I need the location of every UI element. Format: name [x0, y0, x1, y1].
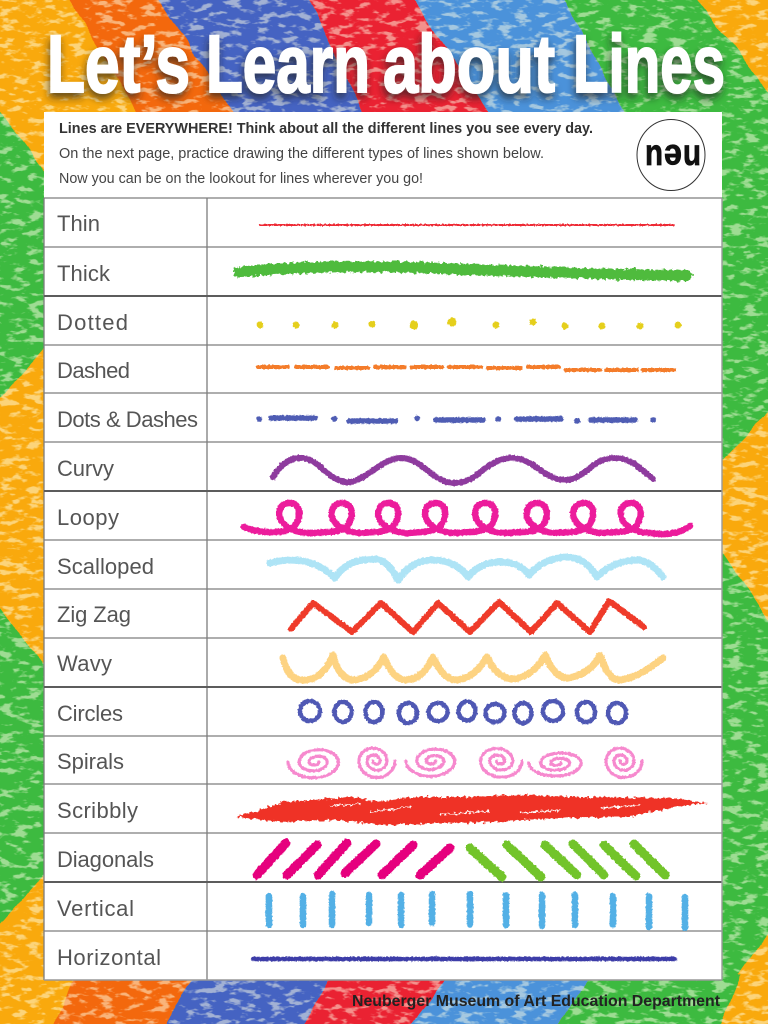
row label: Horizontal: Horizontal: [57, 945, 161, 970]
line sample: vertical: [269, 894, 685, 928]
footer credit: Neuberger Museum of Art Education Department: [352, 993, 721, 1010]
row label: Loopy: Loopy: [57, 505, 119, 530]
row label: Vertical: Vertical: [57, 896, 134, 921]
logo: neu: n: [645, 132, 663, 173]
row label: Wavy: Wavy: [57, 651, 112, 676]
title: Learn: [206, 19, 370, 110]
logo: neu: [637, 120, 705, 190]
row label: Dots & Dashes: Dots & Dashes: [57, 407, 198, 432]
row label: Dotted: Dotted: [57, 310, 128, 335]
row label: Diagonals: Diagonals: [57, 847, 154, 872]
row label: Scalloped: Scalloped: [57, 554, 154, 579]
line sample: diagonals: [257, 843, 665, 877]
line sample: horizontal: [253, 957, 675, 961]
row label: Thin: Thin: [57, 211, 100, 236]
row label: Zig Zag: Zig Zag: [57, 602, 131, 627]
row label: Thick: Thick: [57, 261, 111, 286]
intro text: On the next page, practice drawing the different types of lines shown below.: [59, 145, 544, 162]
line sample: loopy: [244, 503, 690, 534]
row label: Dashed: Dashed: [57, 358, 130, 383]
line sample: dotted: [256, 318, 682, 330]
line sample: thin: [260, 224, 674, 226]
line sample: spirals: [288, 748, 642, 778]
title: [47, 19, 725, 110]
intro text: Lines are EVERYWHERE! Think about all the different lines you see every day.: [59, 120, 593, 137]
line sample: thick: [239, 267, 687, 276]
line sample: wavy: [283, 655, 663, 680]
logo: neu: u: [683, 132, 701, 173]
line sample: scribbly: [236, 795, 707, 825]
row label: Circles: Circles: [57, 701, 123, 726]
line sample: scalloped: [270, 557, 663, 580]
line sample: circles: [300, 701, 626, 723]
row label: Curvy: Curvy: [57, 456, 114, 481]
logo: neu: e: [664, 137, 682, 178]
intro text: [59, 120, 593, 187]
title: about: [383, 19, 555, 110]
row label: Scribbly: Scribbly: [57, 798, 138, 823]
intro text: Now you can be on the lookout for lines wherever you go!: [59, 170, 423, 187]
line sample: dots and dashes: [259, 418, 654, 421]
line sample: dashed: [258, 367, 674, 370]
line sample: curvy: [273, 458, 653, 483]
row label: Spirals: Spirals: [57, 749, 124, 774]
title: Let’s: [47, 19, 190, 110]
line sample: zig zag: [291, 601, 644, 632]
panel: worksheet: [44, 112, 722, 980]
